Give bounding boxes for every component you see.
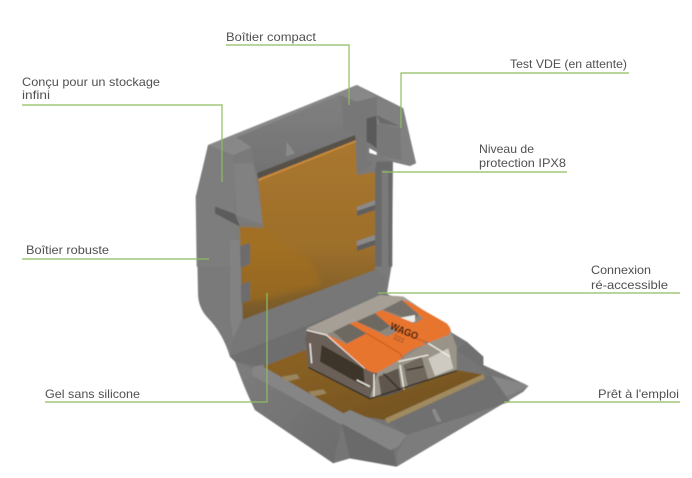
lid: upper section xyxy=(196,85,416,267)
callout: Gel sans silicone xyxy=(45,293,267,402)
callout: Test VDE: Test VDE (en attente) xyxy=(510,57,627,71)
base: amber gel tray xyxy=(263,350,485,420)
callout: Boîtier robuste: Boîtier robuste xyxy=(26,243,109,257)
callout: Connexion ré-accessible xyxy=(378,263,680,293)
base: rear rail xyxy=(397,376,528,467)
callout: Conçu pour un stockage infini: infini xyxy=(22,88,50,102)
callout: Niveau de protection: protection IPX8 xyxy=(479,156,566,170)
lid: lower band xyxy=(230,240,387,357)
callout: Conçu pour un stockage infini xyxy=(22,75,222,182)
callout: Boîtier compact xyxy=(226,30,349,105)
connector xyxy=(305,295,457,399)
connector: WAGO logo: 221 xyxy=(392,334,406,345)
lid: inner clips xyxy=(240,200,375,304)
callout: Niveau de protection xyxy=(382,142,567,172)
base: left rim xyxy=(252,365,344,425)
callout: Prêt à l'emploi: Prêt à l'emploi xyxy=(598,387,679,401)
callout: Niveau de protection: Niveau de xyxy=(479,142,534,156)
gel: moulded connector imprint xyxy=(241,228,322,302)
lid: grey shell silhouette xyxy=(196,85,416,357)
connector: transparent housing xyxy=(305,295,457,398)
base: outer shell xyxy=(230,293,528,467)
callout: Boîtier compact: Boîtier compact xyxy=(226,30,317,44)
connector: orange levers xyxy=(327,300,450,373)
connector: windows xyxy=(333,323,367,343)
connector: WAGO logo: WAGO xyxy=(388,321,420,343)
base: rear inner wall xyxy=(387,376,510,435)
connector: glass highlights xyxy=(307,330,450,397)
illustration: open gel box with connector xyxy=(196,85,528,467)
base: left outer wall xyxy=(235,362,342,463)
base xyxy=(230,293,528,467)
base: front rail xyxy=(342,423,397,467)
base: tray ribs xyxy=(282,374,327,397)
callout: Conçu pour un stockage infini: Conçu pour un stockage xyxy=(22,75,160,89)
callout: Connexion ré-accessible: Connexion xyxy=(591,263,651,277)
lid: amber gel panel xyxy=(240,140,375,320)
base: top band xyxy=(230,293,390,367)
callout: Gel sans silicone: Gel sans silicone xyxy=(45,387,140,401)
callout: Connexion ré-accessible: ré-accessible xyxy=(591,278,668,292)
base: right side wall xyxy=(457,342,492,376)
callout: Test VDE xyxy=(401,57,629,128)
lid: sawtooth rim xyxy=(257,135,356,179)
